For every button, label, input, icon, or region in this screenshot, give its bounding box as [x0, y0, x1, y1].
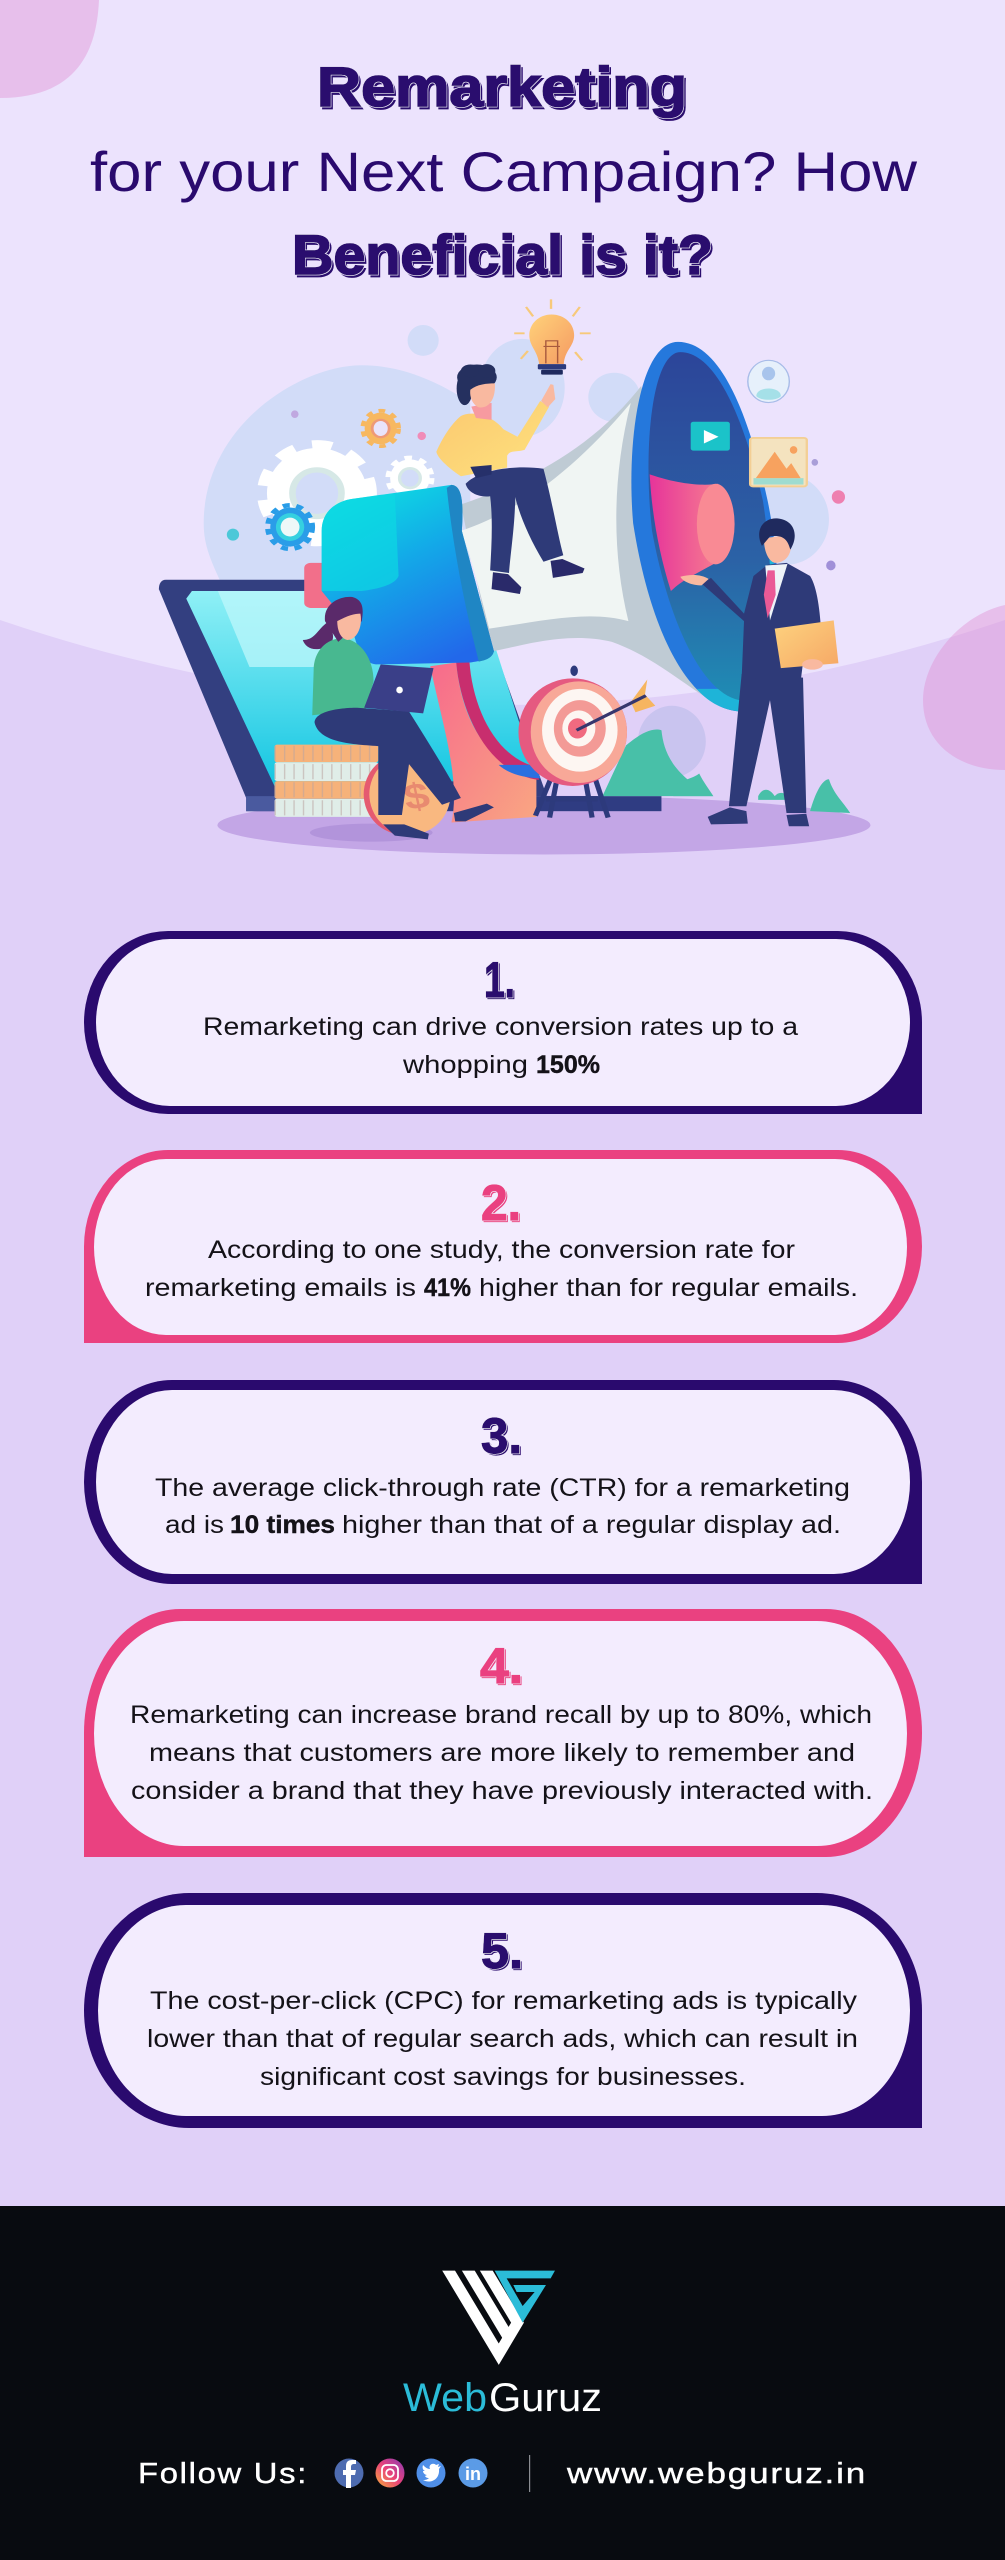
background blobs [204, 325, 829, 777]
card 3 number: 3. [481, 1408, 522, 1464]
card 4 text [130, 1701, 873, 1805]
card 1 panel [96, 939, 910, 1106]
blue gear [268, 505, 312, 549]
card 3 frame [84, 1380, 922, 1584]
card 3 text: higher than that of a regular display ad. [342, 1511, 841, 1539]
ground shadow [217, 796, 871, 854]
card 3 [84, 1380, 922, 1584]
card 4 panel [94, 1621, 907, 1846]
card 4 text: Remarketing can increase brand recall by up to 80%, which [130, 1701, 872, 1729]
title line 3: Beneficial is it? [292, 223, 713, 286]
big dollar coin: $ [400, 774, 434, 818]
megaphone stand ribbon [430, 661, 540, 822]
card 5 [84, 1893, 922, 2128]
card 4 text: consider a brand that they have previously interacted with. [131, 1777, 873, 1805]
pink cone [650, 474, 732, 591]
icon: light bulb [514, 299, 591, 375]
hero illustration: megaphone marketing team [159, 299, 871, 854]
card 4 frame [84, 1609, 922, 1857]
play button [691, 422, 730, 451]
megaphone handle body [322, 485, 494, 664]
decorative blob top left [0, 0, 99, 98]
icon: facebook [334, 2458, 364, 2488]
card 2 number: 2. [481, 1175, 521, 1231]
card 1 number: 1. [484, 952, 515, 1008]
brand name [403, 2376, 602, 2420]
target with arrow [518, 666, 655, 818]
icon: WebGuruz logo mark [444, 2263, 555, 2354]
megaphone horn [461, 386, 730, 710]
big dollar coin [364, 754, 451, 835]
card 3 text: ad is [165, 1511, 224, 1539]
footer background [0, 2206, 1005, 2560]
card 2 text: According to one study, the conversion rate for [208, 1236, 795, 1264]
orange gear [363, 411, 399, 446]
icon: person avatar [748, 360, 789, 403]
floating dots [227, 410, 845, 570]
card 4 text: means that customers are more likely to remember and [149, 1739, 855, 1767]
icon: linkedin [458, 2458, 488, 2488]
card 2 text: 41% [424, 1274, 471, 1302]
stacked coins [274, 745, 378, 817]
decorative blob right [923, 605, 1005, 770]
card 5 text [147, 1987, 858, 2091]
footer [0, 2206, 1005, 2560]
card 1 [84, 931, 922, 1114]
follow us label: Follow Us: [138, 2458, 308, 2490]
card 3 panel [96, 1390, 910, 1574]
card 1 text: whopping [402, 1051, 528, 1079]
icon: instagram [376, 2458, 404, 2488]
icon: image card [750, 438, 807, 486]
white gears [263, 445, 432, 541]
card 2 text: higher than for regular emails. [479, 1274, 858, 1302]
card 2 frame [84, 1150, 922, 1343]
card 5 text: The cost-per-click (CPC) for remarketing ads is typically [150, 1987, 858, 2015]
card 5 frame [84, 1893, 922, 2128]
brand name: Web [403, 2376, 487, 2420]
card 3 text: The average click-through rate (CTR) for a remarketing [155, 1474, 850, 1502]
title line 1: Remarketing [317, 55, 687, 118]
icon: linkedin: in [465, 2464, 481, 2484]
card 5 text: lower than that of regular search ads, which can result in [147, 2025, 858, 2053]
title line 2: for your Next Campaign? How [90, 140, 918, 203]
sitting man with bulb idea [436, 364, 585, 594]
suited man with folder [680, 518, 838, 826]
card 2 panel [94, 1159, 907, 1335]
background lower wave [0, 620, 1005, 2206]
card 2 text [145, 1236, 858, 1302]
card 2 [84, 1150, 922, 1343]
card 1 frame [84, 931, 922, 1114]
brand name: Guruz [489, 2376, 602, 2420]
card 4 [84, 1609, 922, 1857]
card 1 text [203, 1013, 798, 1079]
plants [602, 730, 850, 813]
icon: twitter [416, 2458, 446, 2488]
card 2 text: remarketing emails is [145, 1274, 416, 1302]
megaphone stub [304, 563, 333, 608]
card 5 number: 5. [481, 1923, 523, 1979]
laptop screen backdrop [159, 580, 661, 811]
divider [529, 2455, 530, 2492]
megaphone bell [631, 342, 780, 711]
card 5 text: significant cost savings for businesses. [260, 2063, 746, 2091]
woman with laptop [303, 597, 494, 839]
card 4 number: 4. [480, 1638, 523, 1694]
card 5 panel [98, 1905, 910, 2116]
title [90, 55, 918, 286]
website: www.webguruz.in [566, 2458, 867, 2490]
card 3 text: 10 times [230, 1511, 335, 1539]
card 1 text: Remarketing can drive conversion rates up to a [203, 1013, 798, 1041]
card 1 text: 150% [536, 1051, 600, 1079]
card 3 text [155, 1474, 850, 1539]
